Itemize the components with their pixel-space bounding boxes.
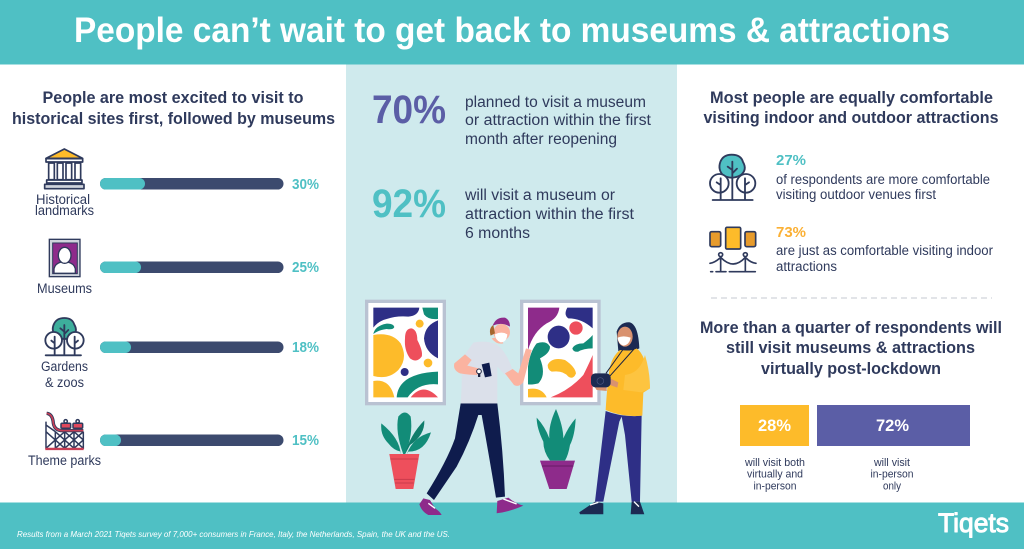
illustration: visitors in a gallery bbox=[365, 300, 650, 515]
stat: 92%: attraction within the first bbox=[465, 206, 635, 223]
heading: comfort bbox=[704, 88, 998, 127]
panel: excitement by attraction type bbox=[12, 88, 335, 468]
heading: most excited: People are most excited to visit to bbox=[42, 88, 304, 107]
label: historical landmarks: landmarks bbox=[35, 203, 94, 218]
icon: theme park roller coaster bbox=[45, 413, 84, 449]
bar: theme parks 15% bbox=[100, 432, 319, 449]
panel: comfort and virtual visits bbox=[700, 88, 1002, 492]
bar: theme parks 15%: 15% bbox=[292, 432, 319, 449]
panel: centre statistics bbox=[365, 88, 652, 515]
heading: virtual visits: More than a quarter of respondents will bbox=[700, 318, 1002, 337]
bar: museums 25% bbox=[100, 259, 319, 276]
caption: in-person only: will visit bbox=[873, 457, 910, 469]
heading: comfort: visiting indoor and outdoor attractions bbox=[704, 108, 998, 127]
block: 72% in-person: 72% bbox=[876, 416, 909, 435]
painting: left abstract bbox=[365, 300, 446, 405]
icon: outdoor trees bbox=[710, 155, 755, 200]
caption: both: in-person bbox=[754, 480, 796, 492]
stat: 92% bbox=[372, 182, 635, 242]
caption: both: virtually and bbox=[747, 468, 803, 480]
block: 28% both bbox=[740, 405, 809, 446]
label: historical landmarks: Historical bbox=[36, 192, 90, 207]
icon: historical landmark temple bbox=[45, 149, 84, 189]
label: historical landmarks bbox=[35, 192, 94, 218]
plant: red pot bbox=[381, 412, 431, 489]
block: 72% in-person bbox=[817, 405, 970, 446]
stat: 70%: or attraction within the first bbox=[465, 112, 652, 129]
label: gardens and zoos bbox=[41, 359, 88, 390]
label: gardens and zoos: Gardens bbox=[41, 359, 88, 374]
caption: both bbox=[744, 457, 805, 492]
icon: indoor exhibits and rope barrier bbox=[710, 227, 756, 272]
header band bbox=[0, 0, 1024, 64]
stat: 70% bbox=[372, 88, 652, 148]
text: 73% indoor: 73% bbox=[776, 225, 806, 241]
text: 73% indoor: attractions bbox=[776, 259, 837, 274]
block: 28% both: 28% bbox=[758, 416, 791, 435]
panel: centre background bbox=[346, 64, 677, 504]
label: museums: Museums bbox=[37, 281, 92, 296]
heading: virtual visits: virtually post-lockdown bbox=[761, 359, 941, 378]
label: gardens and zoos: & zoos bbox=[45, 375, 84, 390]
plant: purple pot bbox=[537, 409, 576, 489]
text: 27% outdoor: visiting outdoor venues first bbox=[776, 187, 936, 202]
painting: right abstract bbox=[520, 300, 601, 405]
stat: 70%: 70% bbox=[372, 88, 446, 132]
text: 27% outdoor: of respondents are more comfortable bbox=[776, 172, 990, 187]
text: 27% outdoor bbox=[776, 153, 990, 202]
text: 27% outdoor: 27% bbox=[776, 153, 806, 169]
logo: Tiqets: Tiqets bbox=[938, 508, 1009, 538]
heading: most excited: historical sites first, followed by museums bbox=[12, 109, 335, 128]
heading: virtual visits bbox=[700, 318, 1002, 378]
stat: 70%: month after reopening bbox=[465, 131, 617, 148]
caption: both: will visit both bbox=[744, 457, 805, 469]
stat: 92%: 92% bbox=[372, 182, 446, 226]
caption: in-person only: only bbox=[883, 480, 901, 492]
heading: most excited bbox=[12, 88, 335, 128]
bar: museums 25%: 25% bbox=[292, 259, 319, 276]
caption: in-person only bbox=[870, 457, 914, 492]
title: People can’t wait to get back to museums & attractions bbox=[74, 11, 950, 50]
label: theme parks: Theme parks bbox=[28, 453, 101, 468]
text: 73% indoor: are just as comfortable visiting indoor bbox=[776, 243, 993, 258]
icon: museum portrait bbox=[49, 239, 80, 277]
footnote: Results from a March 2021 Tiqets survey of 7,000+ consumers in France, Italy, the Netherlands, Spain, the UK and the US. bbox=[17, 529, 450, 539]
heading: virtual visits: still visit museums & attractions bbox=[726, 338, 975, 357]
figure: man in mask bbox=[419, 318, 532, 515]
icon: gardens trees bbox=[45, 318, 84, 355]
figure: woman with camera bbox=[579, 322, 650, 514]
bar: gardens and zoos 18% bbox=[100, 339, 319, 356]
text: 73% indoor bbox=[776, 225, 993, 274]
heading: comfort: Most people are equally comfortable bbox=[710, 88, 993, 107]
stat: 70%: planned to visit a museum bbox=[465, 94, 646, 111]
bar: historical landmarks 30% bbox=[100, 176, 319, 193]
stat: 92%: 6 months bbox=[465, 225, 530, 242]
footer band bbox=[0, 502, 1024, 549]
caption: in-person only: in-person bbox=[870, 468, 914, 480]
bar: gardens and zoos 18%: 18% bbox=[292, 339, 319, 356]
stat: 92%: will visit a museum or bbox=[464, 187, 615, 204]
bar: historical landmarks 30%: 30% bbox=[292, 176, 319, 193]
